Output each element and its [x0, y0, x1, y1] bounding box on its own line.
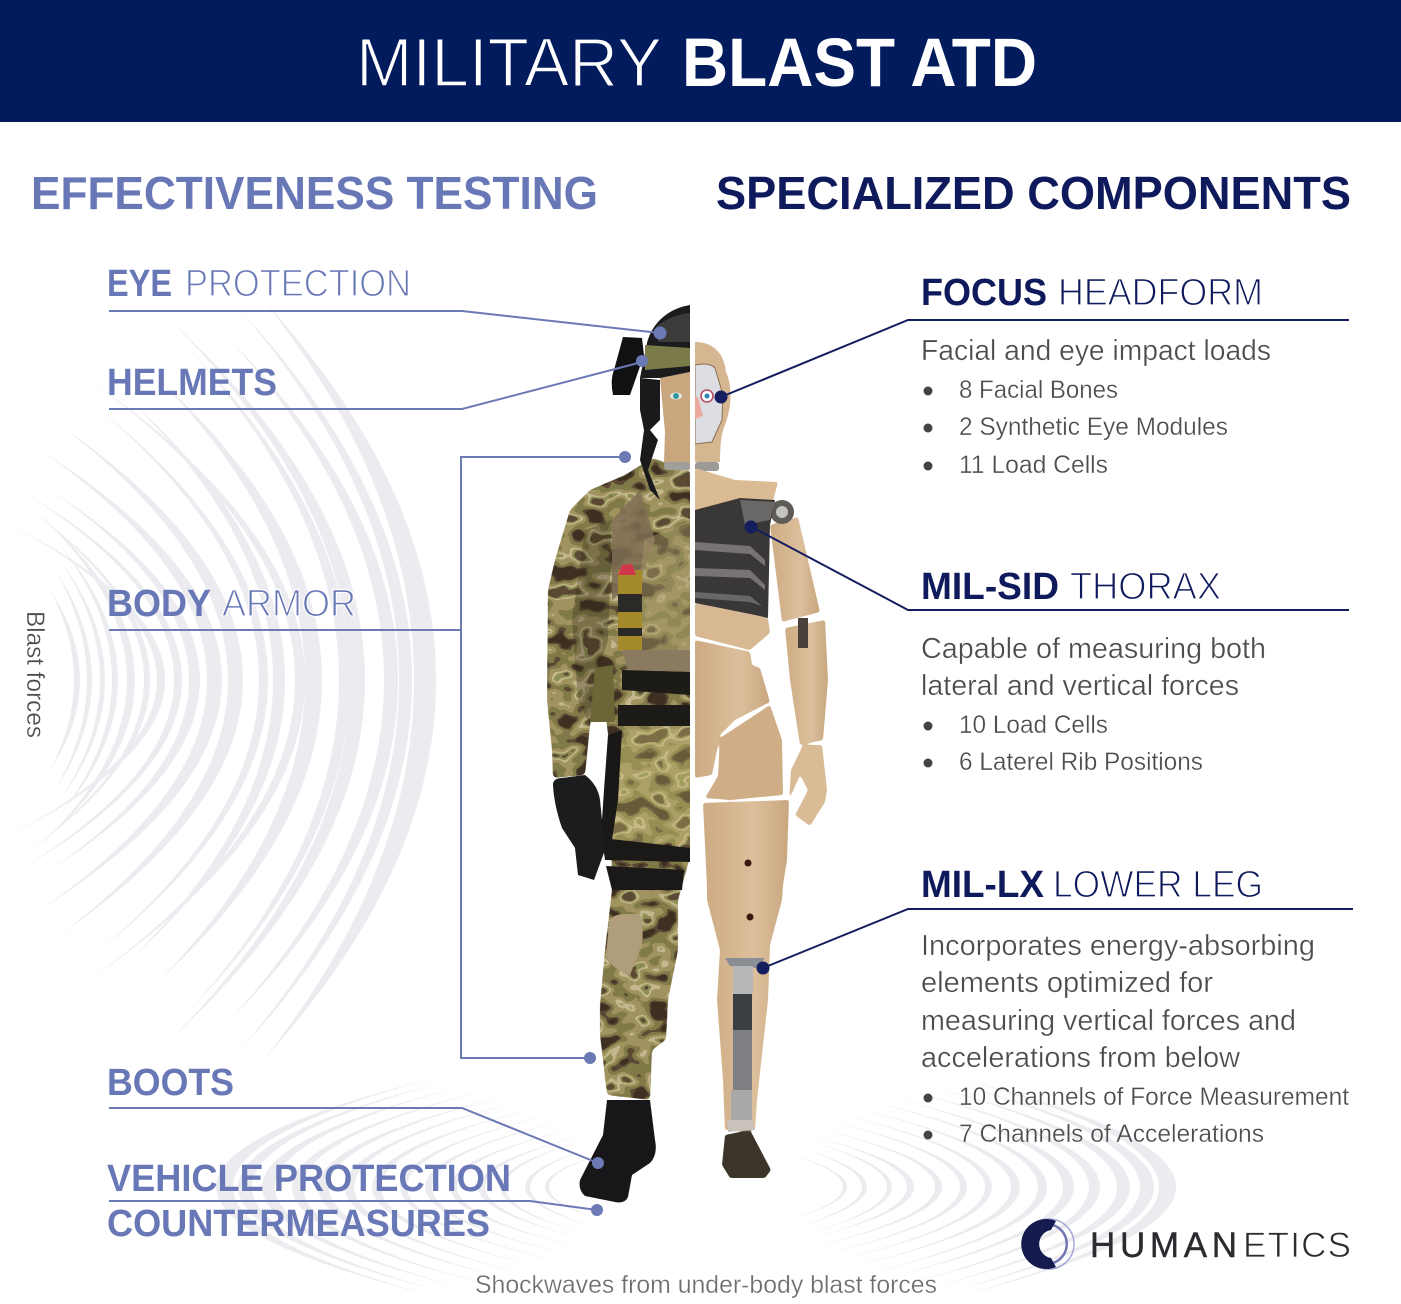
focus bullet list: 2 Synthetic Eye Modules [959, 413, 1228, 441]
header banner [0, 0, 1401, 122]
tourniquet strap [618, 564, 642, 650]
glove [553, 775, 605, 880]
undershirt panel [612, 490, 655, 600]
lower leg bullet list: 10 Channels of Force Measurement [959, 1083, 1349, 1111]
neck collar ring [664, 462, 690, 470]
right callout lines [721, 320, 1353, 968]
synthetic eye [701, 390, 713, 402]
heading: mil-lx lower leg [921, 864, 1263, 906]
panel: mil-sid thorax [921, 566, 1266, 776]
upper arm [770, 517, 820, 622]
label: eye protection [107, 263, 411, 305]
left callout dots [584, 326, 666, 1216]
abdomen [695, 640, 770, 778]
headset and strap [640, 378, 660, 500]
foot [722, 1130, 771, 1178]
focus bullet list: 11 Load Cells [959, 451, 1108, 479]
label: eye protection: EYE [107, 263, 172, 305]
focus bullet list: 8 Facial Bones [959, 376, 1118, 404]
label: eye protection: PROTECTION [185, 263, 411, 305]
focus description: Facial and eye impact loads [921, 335, 1271, 367]
figure centre divider [690, 300, 695, 1210]
lower leg description: Incorporates energy-absorbing [921, 930, 1315, 962]
MIL-LX lower leg instrumentation [725, 958, 765, 1132]
heading: mil-sid thorax: THORAX [1070, 566, 1221, 608]
heading: focus headform [921, 272, 1263, 314]
abdomen shirt [622, 650, 690, 672]
helmet [640, 305, 690, 378]
panel: mil-lx lower leg [921, 864, 1349, 1148]
background: under-body shockwaves, right side [792, 1079, 1176, 1295]
heading: mil-lx lower leg: MIL-LX [921, 864, 1045, 906]
forearm [785, 620, 828, 745]
soldier neck and face [660, 372, 690, 470]
label: body armor [107, 583, 356, 625]
label: boots: BOOTS [107, 1062, 234, 1104]
background: under-body shockwaves, left side [216, 1079, 600, 1295]
title: MILITARY [356, 24, 662, 101]
belt straps [618, 670, 690, 726]
dummy body parts [695, 468, 828, 1178]
thigh straps [602, 838, 690, 890]
knee pad [606, 914, 643, 975]
heading: mil-sid thorax [921, 566, 1221, 608]
thorax description [921, 633, 1266, 702]
caption: shockwaves: Shockwaves from under-body blast forces [475, 1271, 937, 1299]
helmet pouch [612, 337, 644, 395]
left callout lines [109, 311, 660, 1210]
label: body armor: ARMOR [222, 583, 356, 625]
holster [600, 730, 622, 850]
label: vehicle protection countermeasures: VEHICLE PROTECTION [107, 1158, 511, 1200]
MIL-SID thorax [695, 498, 775, 618]
lower leg description: elements optimized for [921, 967, 1213, 999]
panel: focus headform [921, 272, 1271, 479]
logo wordmark: ETICS [1243, 1226, 1351, 1265]
lower leg description [921, 930, 1315, 1074]
logo mark [1021, 1219, 1074, 1269]
soldier eye [670, 392, 682, 400]
lower chest [695, 603, 770, 650]
lower leg description: accelerations from below [921, 1042, 1241, 1074]
dummy neck and head [695, 342, 730, 462]
goggles [656, 313, 690, 342]
logo: humanetics [1021, 1219, 1351, 1269]
figure: ATD dummy half [695, 342, 828, 1178]
heading: specialized components: SPECIALIZED COMPONENTS [716, 167, 1351, 219]
helmet camo band [645, 345, 690, 370]
neck collar [695, 462, 719, 471]
instrumented face plate [695, 364, 723, 444]
right callout dots [714, 390, 770, 974]
heading: mil-sid thorax: MIL-SID [921, 566, 1059, 608]
logo wordmark [1090, 1226, 1351, 1265]
label: blast forces: Blast forces [21, 611, 49, 738]
logo wordmark: HUMAN [1090, 1226, 1237, 1265]
thorax bullet list [924, 711, 1203, 776]
heading: effectiveness testing: EFFECTIVENESS TESTING [31, 167, 598, 219]
lower leg bullet list: 7 Channels of Accelerations [959, 1120, 1264, 1148]
title: BLAST ATD [682, 24, 1037, 101]
soldier camo uniform [547, 458, 692, 1100]
heading: focus headform: HEADFORM [1058, 272, 1263, 314]
lower leg bullet list [924, 1083, 1349, 1148]
thigh holes [744, 860, 754, 920]
background: blast force shockwaves from the left [10, 302, 436, 1058]
elbow clip [798, 618, 808, 648]
thorax bullet list: 6 Laterel Rib Positions [959, 748, 1203, 776]
figure: soldier half [547, 305, 692, 1202]
label: helmets: HELMETS [107, 362, 277, 404]
pelvis [705, 705, 783, 800]
heading: mil-lx lower leg: LOWER LEG [1053, 864, 1263, 906]
nose [695, 395, 703, 419]
thorax description: Capable of measuring both [921, 633, 1266, 665]
vest panel [625, 520, 690, 650]
upper chest [695, 468, 778, 512]
boot [580, 1100, 656, 1202]
hand [789, 745, 827, 826]
focus bullet list [924, 376, 1228, 479]
heading: focus headform: FOCUS [921, 272, 1047, 314]
thigh highlight [612, 728, 690, 845]
label: body armor: BODY [107, 583, 211, 625]
lower leg description: measuring vertical forces and [921, 1005, 1296, 1037]
thorax bullet list: 10 Load Cells [959, 711, 1108, 739]
thigh [703, 800, 789, 1130]
arm shadow [572, 520, 612, 725]
label: vehicle protection countermeasures [107, 1158, 511, 1245]
shoulder joint [770, 500, 794, 524]
side pouch [590, 665, 615, 722]
title [356, 24, 1037, 101]
thorax description: lateral and vertical forces [921, 670, 1239, 702]
label: vehicle protection countermeasures: COUNTERMEASURES [107, 1203, 490, 1245]
